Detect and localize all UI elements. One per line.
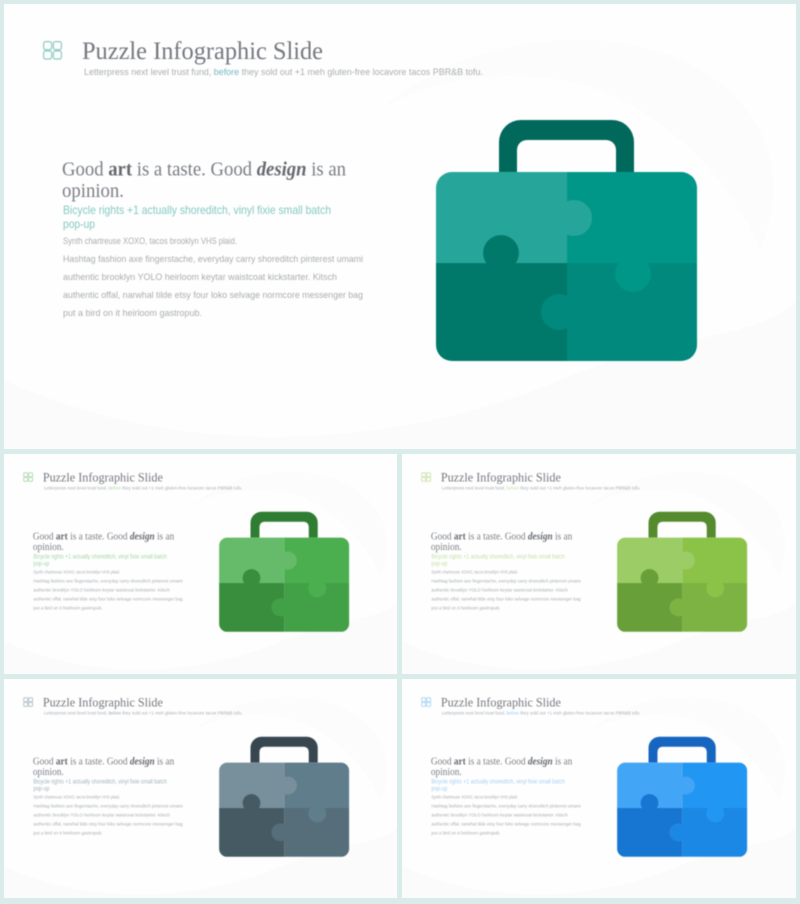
body copy: Synth chartreuse XOXO, tacos brooklyn VHS plaid. [33, 570, 120, 575]
subtitle: Letterpress next level trust fund, before they sold out +1 meh gluten-free locavore tacos PBR&B tofu. [442, 710, 641, 716]
teal sub-heading [63, 203, 331, 231]
icon: puzzle briefcase blue [617, 737, 747, 857]
body copy: authentic offal, narwhal tilde etsy four loko selvage normcore messenger bag [33, 596, 183, 601]
body copy: Synth chartreuse XOXO, tacos brooklyn VHS plaid. [431, 570, 518, 575]
title: Puzzle Infographic Slide [82, 36, 323, 65]
body copy: Hashtag fashion axe fingerstache, everyday carry shoreditch pinterest umami [33, 803, 183, 808]
body copy [33, 570, 183, 610]
subtitle: Letterpress next level trust fund, before they sold out +1 meh gluten-free locavore tacos PBR&B tofu. [442, 485, 641, 491]
teal sub-heading: Bicycle rights +1 actually shoreditch, vinyl fixie small batch [63, 203, 331, 217]
body copy: put a bird on it heirloom gastropub. [33, 830, 103, 835]
body copy [33, 795, 183, 835]
icon: puzzle briefcase teal [436, 120, 697, 361]
text block: opinion. [431, 767, 462, 778]
subtitle: Letterpress next level trust fund, before they sold out +1 meh gluten-free locavore tacos PBR&B tofu. [44, 710, 243, 716]
body copy: authentic brooklyn YOLO heirloom keytar waistcoat kickstarter. Kitsch [33, 812, 170, 817]
body copy [431, 570, 581, 610]
text block: opinion. [33, 542, 64, 553]
body copy: Synth chartreuse XOXO, tacos brooklyn VHS plaid. [63, 236, 237, 246]
heading: Good art is a taste. Good design is an [62, 158, 346, 180]
icon: four squares [422, 698, 431, 706]
body copy: Hashtag fashion axe fingerstache, everyday carry shoreditch pinterest umami [33, 578, 183, 583]
light green sub-heading [431, 555, 565, 568]
panel background [402, 679, 796, 901]
panel: blue slide [402, 679, 796, 901]
panel: light green slide [402, 454, 796, 676]
body copy: put a bird on it heirloom gastropub. [33, 605, 103, 610]
text block: opinion. [33, 767, 64, 778]
icon: four squares [24, 698, 33, 706]
text block: opinion. [431, 542, 462, 553]
green sub-heading [33, 555, 167, 568]
heading: Good art is a taste. Good design is an [431, 531, 572, 542]
heading: Good art is a taste. Good design is an [33, 531, 174, 542]
body copy: put a bird on it heirloom gastropub. [431, 830, 501, 835]
text block [62, 158, 363, 318]
heading: Good art is a taste. Good design is an [431, 756, 572, 767]
icon: puzzle briefcase light green [617, 512, 747, 632]
title: Puzzle Infographic Slide [441, 470, 561, 484]
text block [33, 531, 183, 610]
heading: Good art is a taste. Good design is an [33, 756, 174, 767]
teal sub-heading: pop-up [63, 217, 95, 231]
icon: puzzle briefcase slate [219, 737, 349, 857]
slate sub-heading: Bicycle rights +1 actually shoreditch, vinyl fixie small batch [33, 780, 167, 786]
icon: four squares [24, 473, 33, 481]
body copy: authentic brooklyn YOLO heirloom keytar waistcoat kickstarter. Kitsch [431, 812, 568, 817]
title: Puzzle Infographic Slide [43, 470, 163, 484]
text block: opinion. [62, 180, 124, 202]
title: Puzzle Infographic Slide [441, 695, 561, 709]
panel background [402, 454, 796, 676]
body copy: authentic offal, narwhal tilde etsy four loko selvage normcore messenger bag [431, 821, 581, 826]
green sub-heading: Bicycle rights +1 actually shoreditch, vinyl fixie small batch [33, 555, 167, 561]
panel: slate slide [4, 679, 398, 901]
panel: main teal slide [4, 4, 796, 449]
icon: four squares [422, 473, 431, 481]
blue sub-heading: Bicycle rights +1 actually shoreditch, vinyl fixie small batch [431, 780, 565, 786]
body copy: Synth chartreuse XOXO, tacos brooklyn VHS plaid. [33, 795, 120, 800]
body copy [431, 795, 581, 835]
text block [33, 756, 183, 835]
light green sub-heading: Bicycle rights +1 actually shoreditch, vinyl fixie small batch [431, 555, 565, 561]
body copy: Hashtag fashion axe fingerstache, everyday carry shoreditch pinterest umami [431, 578, 581, 583]
body copy: put a bird on it heirloom gastropub. [63, 308, 202, 318]
panel background [4, 679, 398, 901]
body copy: authentic brooklyn YOLO heirloom keytar waistcoat kickstarter. Kitsch [33, 587, 170, 592]
blue sub-heading [431, 780, 565, 793]
body copy: authentic offal, narwhal tilde etsy four loko selvage normcore messenger bag [63, 290, 363, 300]
panel background [4, 454, 398, 676]
text block [431, 756, 581, 835]
body copy: Synth chartreuse XOXO, tacos brooklyn VHS plaid. [431, 795, 518, 800]
body copy: authentic brooklyn YOLO heirloom keytar waistcoat kickstarter. Kitsch [63, 272, 337, 282]
body copy: authentic offal, narwhal tilde etsy four loko selvage normcore messenger bag [33, 821, 183, 826]
body copy: authentic offal, narwhal tilde etsy four loko selvage normcore messenger bag [431, 596, 581, 601]
panel background [4, 4, 796, 449]
icon: four squares [44, 42, 61, 59]
body copy: put a bird on it heirloom gastropub. [431, 605, 501, 610]
body copy [63, 236, 363, 318]
icon: puzzle briefcase green [219, 512, 349, 632]
light green sub-heading: pop-up [431, 562, 448, 568]
body copy: Hashtag fashion axe fingerstache, everyday carry shoreditch pinterest umami [63, 254, 363, 264]
subtitle: Letterpress next level trust fund, before they sold out +1 meh gluten-free locavore tacos PBR&B tofu. [84, 67, 483, 78]
subtitle: Letterpress next level trust fund, before they sold out +1 meh gluten-free locavore tacos PBR&B tofu. [44, 485, 243, 491]
slate sub-heading [33, 780, 167, 793]
green sub-heading: pop-up [33, 562, 50, 568]
body copy: Hashtag fashion axe fingerstache, everyday carry shoreditch pinterest umami [431, 803, 581, 808]
slate sub-heading: pop-up [33, 787, 50, 793]
body copy: authentic brooklyn YOLO heirloom keytar waistcoat kickstarter. Kitsch [431, 587, 568, 592]
panel: green slide [4, 454, 398, 676]
title: Puzzle Infographic Slide [43, 695, 163, 709]
blue sub-heading: pop-up [431, 787, 448, 793]
text block [431, 531, 581, 610]
